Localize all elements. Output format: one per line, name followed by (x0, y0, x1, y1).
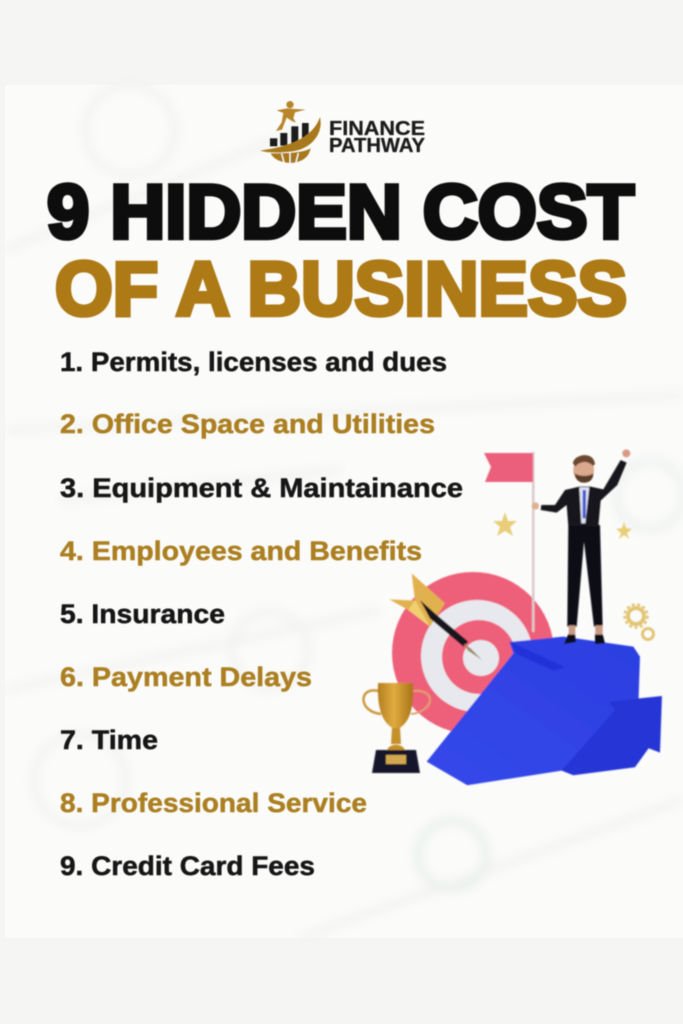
shirt and tie (579, 487, 589, 523)
icon: blue arrows (427, 637, 662, 785)
item 9: 9. Credit Card Fees (60, 851, 315, 881)
title: 9 HIDDEN COST (47, 170, 634, 255)
legs (567, 525, 603, 627)
hand holding pole (532, 502, 539, 510)
logo icon (260, 101, 321, 163)
item 2: 2. Office Space and Utilities (60, 409, 435, 439)
item 5: 5. Insurance (60, 599, 225, 629)
item 3: 3. Equipment & Maintainance (60, 473, 463, 503)
icon: businessman (532, 449, 630, 644)
logo wordmark (329, 117, 425, 157)
large arrow (427, 637, 640, 785)
arrow fold shadow (511, 642, 565, 671)
logo wordmark: PATHWAY (329, 134, 425, 157)
item 4: 4. Employees and Benefits (60, 536, 422, 566)
logo: Finance Pathway (260, 101, 425, 163)
icon: gears (624, 604, 654, 640)
logo wordmark: FINANCE (329, 117, 425, 140)
list of nine hidden costs (60, 347, 463, 881)
illustration: target, dart, trophy, arrows and businessman (363, 449, 662, 785)
item 1: 1. Permits, licenses and dues (60, 347, 447, 377)
icon: target (392, 572, 554, 734)
icon: flag on pole (484, 452, 534, 632)
item 8: 8. Professional Service (60, 788, 367, 818)
small arrow (562, 696, 662, 775)
raised hand (622, 449, 630, 457)
item 7: 7. Time (60, 725, 158, 755)
icon: trophy (363, 683, 430, 773)
head (573, 457, 594, 483)
jacket and arms (541, 460, 627, 527)
icon: stars (493, 512, 632, 539)
item 6: 6. Payment Delays (60, 662, 312, 692)
title (47, 170, 634, 332)
title: OF A BUSINESS (55, 247, 627, 332)
shoes (564, 633, 605, 644)
icon: dart (389, 573, 482, 660)
